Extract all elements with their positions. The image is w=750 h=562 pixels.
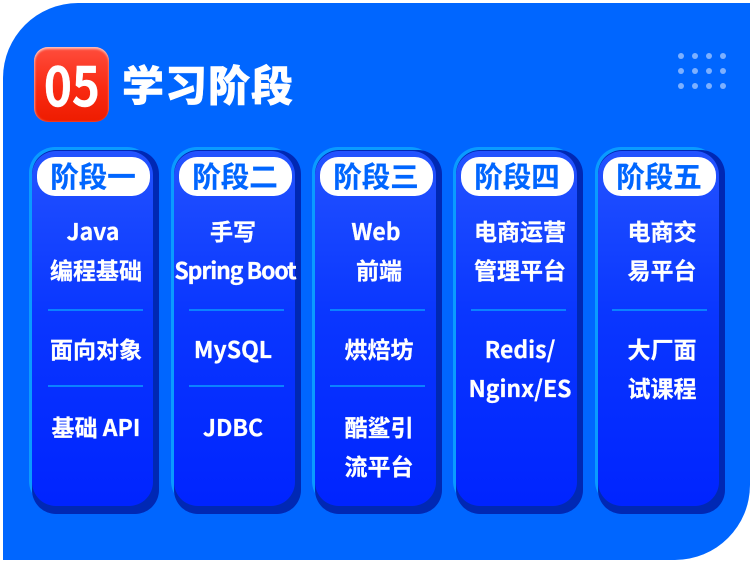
panel: stage five <box>595 147 725 514</box>
stage one item: object oriented: 面向对象 <box>50 331 142 365</box>
title: 学习阶段 <box>122 53 294 114</box>
stage one item: Java basics: Java <box>66 213 119 247</box>
panel: stage three <box>312 147 442 514</box>
stage three item: Web front end: Web <box>351 213 401 247</box>
stage five item: interview course <box>628 331 696 404</box>
stage three item: traffic platform: 酷鲨引 <box>344 409 414 443</box>
stage four item: Redis Nginx ES: Nginx/ES <box>468 370 572 404</box>
stage four item: e-commerce operations <box>474 213 566 286</box>
stage five item: interview course: 试课程 <box>628 370 696 404</box>
stage four item: e-commerce operations: 电商运营 <box>474 213 566 247</box>
stage one item: Java basics <box>50 213 142 286</box>
stage four item: Redis Nginx ES: Redis/ <box>485 331 555 365</box>
panel: stage four <box>453 147 583 514</box>
stage five item: e-commerce trading platform: 电商交 <box>628 213 696 247</box>
stage one item: Java basics: 编程基础 <box>50 252 142 286</box>
stage three item: bakery: 烘焙坊 <box>344 331 414 365</box>
panel: stage two <box>171 147 301 514</box>
stage three item: traffic platform <box>344 409 414 482</box>
stage two heading: 阶段二 <box>192 155 278 196</box>
stage four item: Redis Nginx ES <box>468 331 572 404</box>
stage five heading: 阶段五 <box>616 155 702 196</box>
stage three item: traffic platform: 流平台 <box>344 448 414 482</box>
stage four item: e-commerce operations: 管理平台 <box>474 252 566 286</box>
panel: stage one <box>29 147 159 514</box>
stage two item: MySQL: MySQL <box>194 331 272 365</box>
stage three item: Web front end: 前端 <box>356 252 402 286</box>
stage one item: basic API: 基础 API <box>52 409 140 443</box>
stage two item: handwritten Spring Boot <box>174 213 296 286</box>
icon: number badge 05: 05 <box>43 43 100 122</box>
stage three heading: 阶段三 <box>333 155 419 196</box>
stage five item: e-commerce trading platform: 易平台 <box>628 252 696 286</box>
stage three item: Web front end <box>351 213 402 286</box>
stage two item: JDBC: JDBC <box>203 409 263 443</box>
decorative dot grid <box>678 53 726 89</box>
stage two item: handwritten Spring Boot: 手写 <box>210 213 256 247</box>
stage five item: interview course: 大厂面 <box>628 331 696 365</box>
stage two item: handwritten Spring Boot: Spring Boot <box>174 252 296 286</box>
stage four heading: 阶段四 <box>474 155 560 196</box>
stage one heading: 阶段一 <box>50 155 136 196</box>
stage five item: e-commerce trading platform <box>628 213 696 286</box>
